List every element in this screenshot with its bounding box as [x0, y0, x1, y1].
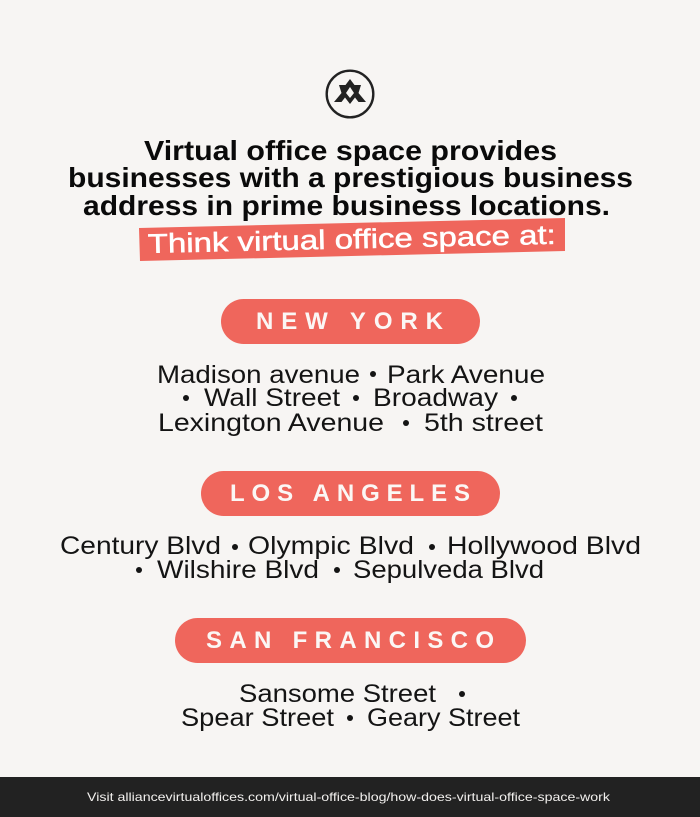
label pill: New York — [221, 299, 480, 344]
street list: Los Angeles: Century Blvd — [60, 532, 221, 560]
street list: New York: Park Avenue — [387, 361, 545, 389]
heading: address in prime business locations. — [83, 190, 610, 221]
panel: New York — [157, 299, 545, 437]
footer bar: Visit alliancevirtualoffices.com/virtual-office-blog/how-does-virtual-office-space-work — [87, 790, 611, 804]
icon: logo — [327, 71, 373, 117]
street list: New York: Lexington Avenue — [158, 409, 384, 437]
heading: businesses with a prestigious business — [68, 162, 633, 193]
street list: San Francisco — [181, 680, 520, 732]
label pill: San Francisco — [175, 618, 526, 663]
label pill: Los Angeles: LOS ANGELES — [230, 480, 470, 507]
street list: San Francisco: Geary Street — [367, 704, 520, 732]
street list: Los Angeles — [60, 532, 641, 584]
heading: Virtual office space provides — [144, 135, 557, 166]
highlighted callout — [139, 218, 565, 261]
street list: San Francisco: Spear Street — [181, 704, 334, 732]
heading — [68, 135, 633, 221]
highlighted callout: Think virtual office space at: — [147, 220, 556, 259]
street list: Los Angeles: Olympic Blvd — [248, 532, 414, 560]
street list: Los Angeles: Wilshire Blvd — [157, 556, 319, 584]
footer bar — [0, 777, 700, 817]
label pill: New York: NEW YORK — [256, 308, 444, 335]
street list: New York: Broadway — [373, 384, 499, 412]
panel: Los Angeles — [60, 471, 641, 584]
street list: New York: Madison avenue — [157, 361, 360, 389]
street list: New York: 5th street — [424, 409, 543, 437]
street list: Los Angeles: Sepulveda Blvd — [353, 556, 544, 584]
street list: San Francisco: Sansome Street — [239, 680, 436, 708]
label pill: Los Angeles — [201, 471, 500, 516]
street list: New York — [157, 361, 545, 437]
label pill: San Francisco: SAN FRANCISCO — [206, 627, 494, 654]
street list: Los Angeles: Hollywood Blvd — [447, 532, 641, 560]
panel: San Francisco — [175, 618, 526, 732]
street list: New York: Wall Street — [204, 384, 340, 412]
